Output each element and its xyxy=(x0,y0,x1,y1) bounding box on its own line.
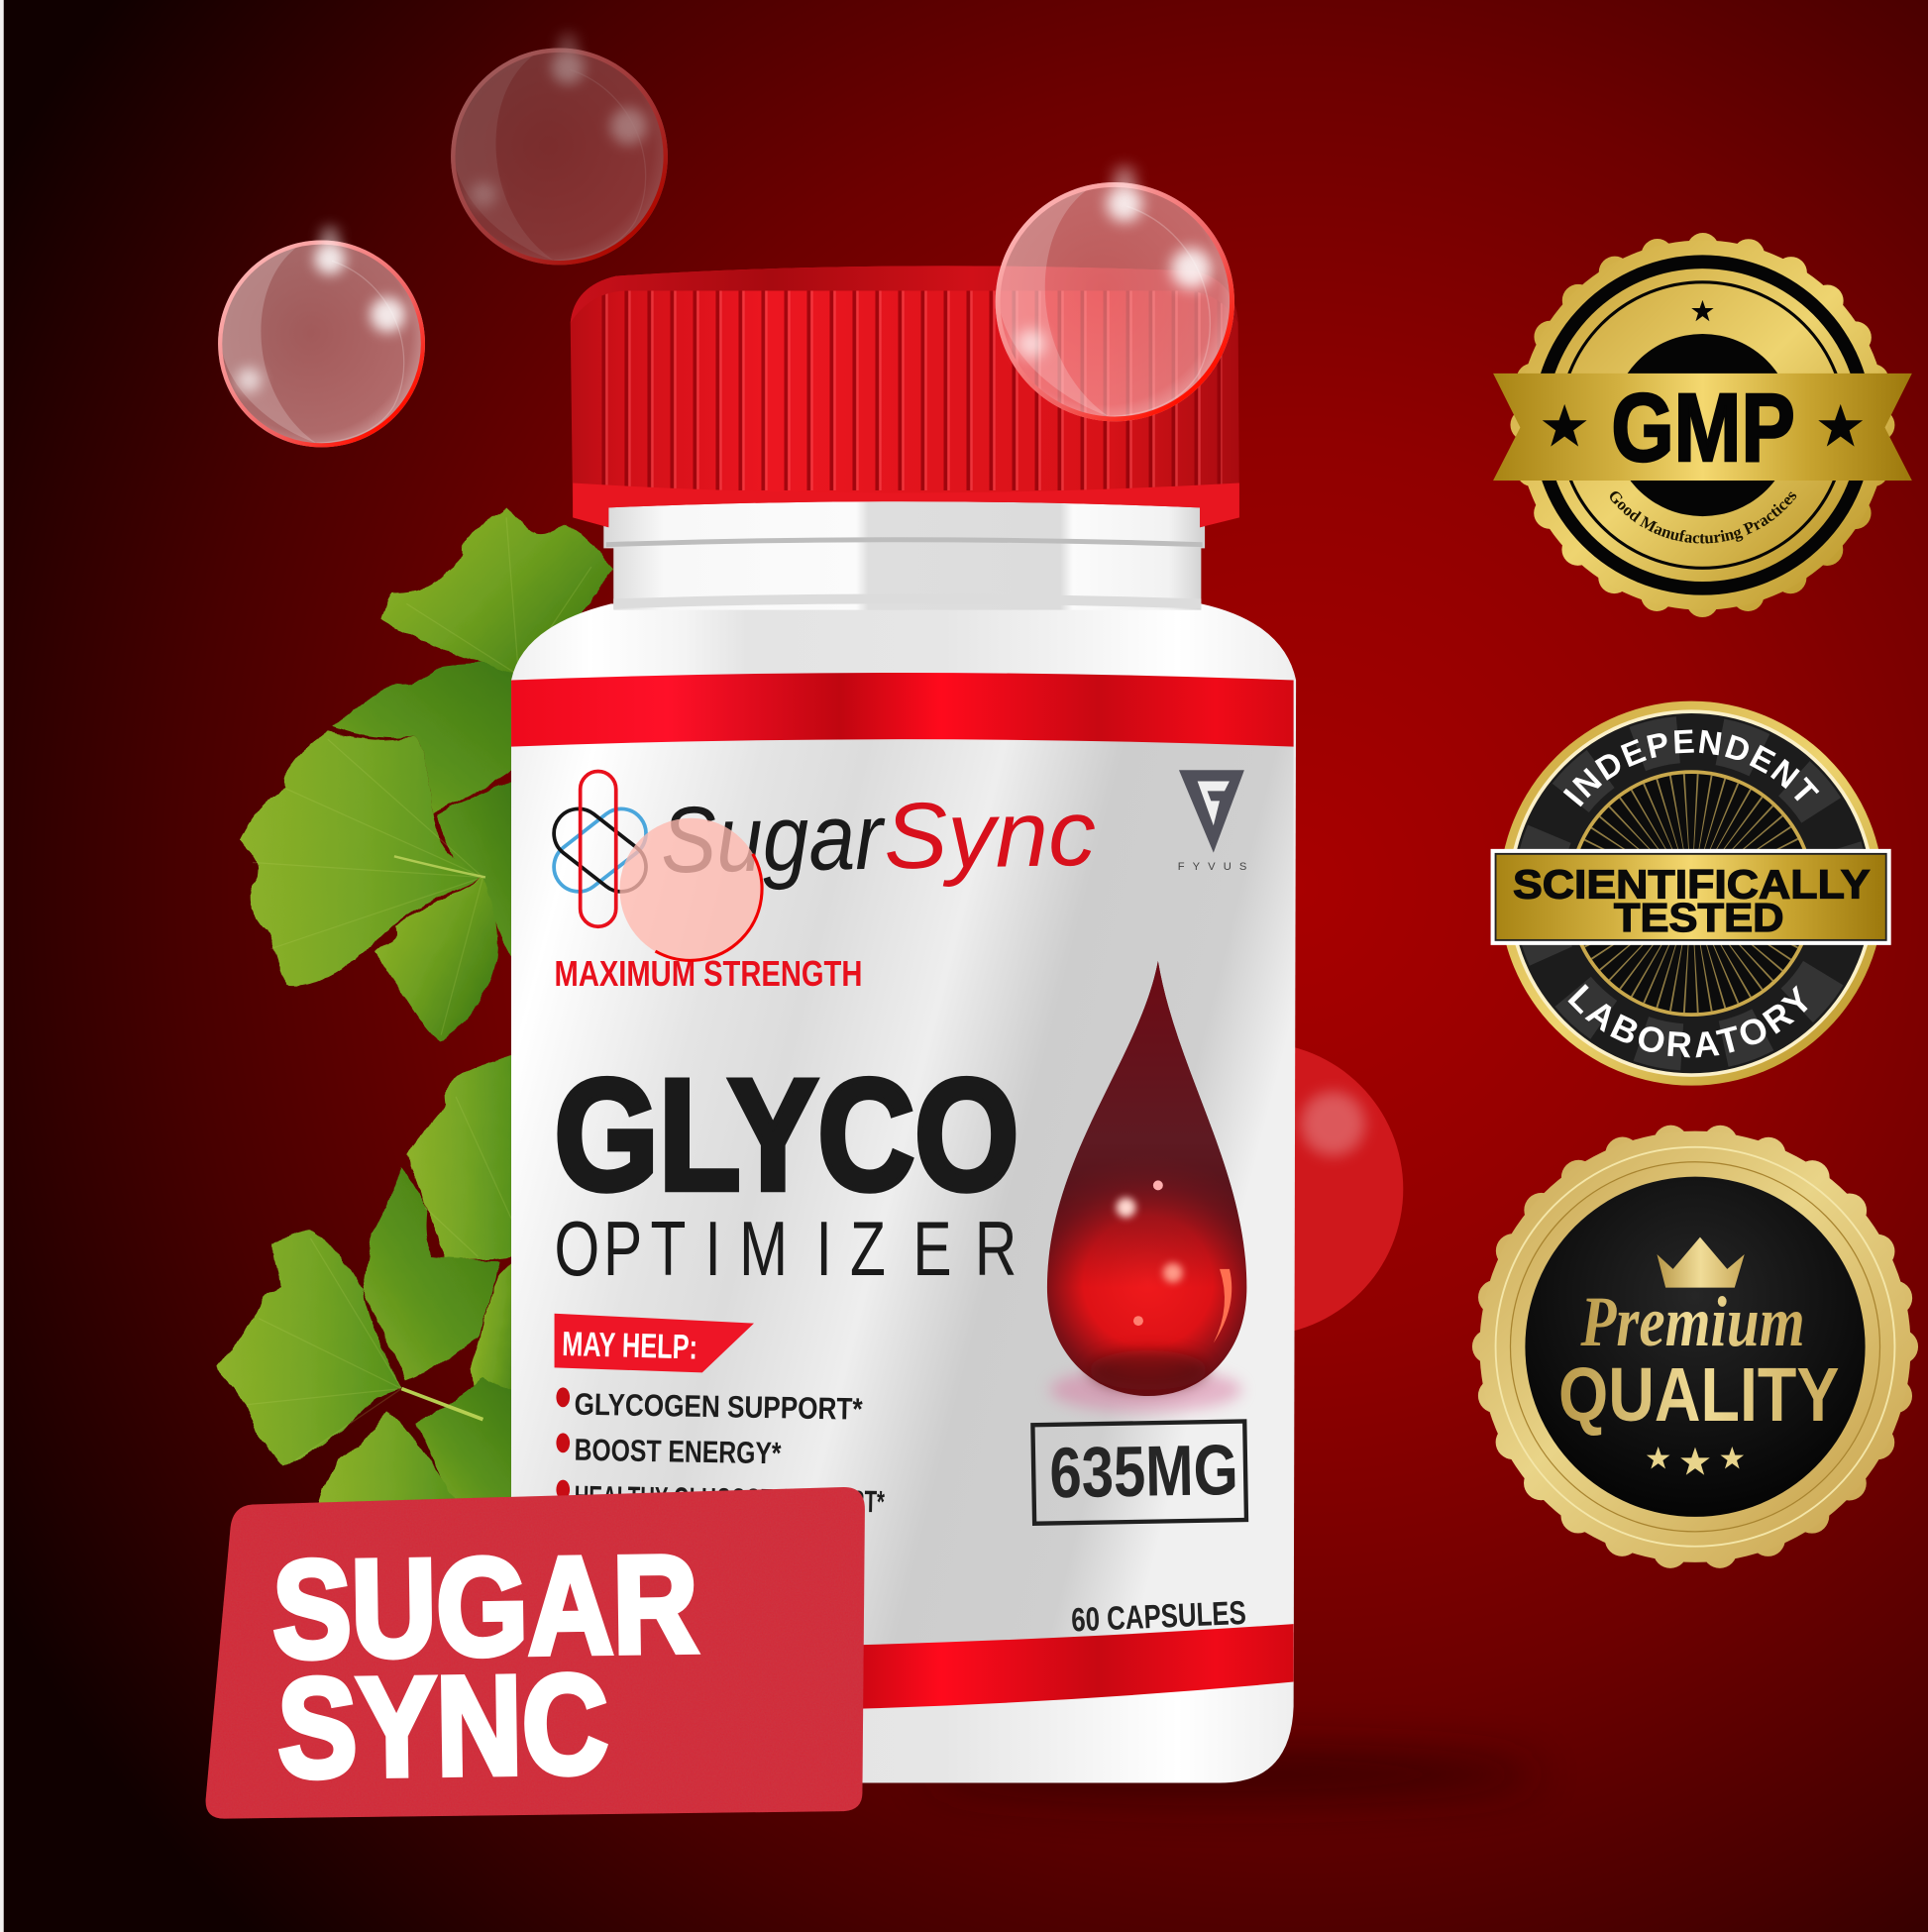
leaf vein: upper stem xyxy=(394,856,485,877)
leaf: big left fan xyxy=(217,1230,401,1466)
blood drop icon xyxy=(1047,961,1246,1412)
bubble: over bottle cap xyxy=(996,165,1234,421)
bottle neck xyxy=(603,499,1205,610)
bottle body xyxy=(511,603,1296,1783)
bubble: small, over logo xyxy=(619,818,763,961)
brand logo: atom mark xyxy=(544,772,656,926)
seal scallops xyxy=(1527,249,1878,601)
crown icon xyxy=(1657,1237,1745,1288)
manufacturer logo xyxy=(1178,770,1246,873)
quality: QUALITY xyxy=(1558,1352,1839,1438)
dosage box xyxy=(1032,1422,1246,1524)
leaf: rear low xyxy=(416,1377,517,1509)
leaf: right small xyxy=(471,1256,517,1503)
leaf veins: lower cluster xyxy=(247,1097,517,1460)
product name: optimizer: OPTIMIZER xyxy=(555,1205,1017,1292)
badge: scientifically tested xyxy=(1490,701,1891,1086)
capsule count: 60 CAPSULES xyxy=(1071,1595,1247,1640)
floor shadow under bottle xyxy=(924,1750,1540,1799)
ribbon xyxy=(1491,849,1891,945)
leaf: lower large fan xyxy=(374,877,497,1041)
badge: GMP xyxy=(1493,233,1912,617)
may help banner xyxy=(555,1314,754,1372)
ribbon star right xyxy=(1818,404,1863,447)
dosage box: 635MG xyxy=(1049,1431,1238,1513)
may help banner: MAY HELP: xyxy=(562,1325,698,1367)
brand card: sugar: SUGAR xyxy=(271,1527,698,1687)
leaf: upper right xyxy=(406,1053,517,1259)
curved caption: Good Manufacturing Practices xyxy=(1610,491,1797,543)
three stars xyxy=(1647,1447,1744,1475)
benefit: glycogen support: GLYCOGEN SUPPORT* xyxy=(574,1387,864,1427)
curved text: independent: INDEPENDENT xyxy=(1563,729,1819,806)
ribbon stars xyxy=(1543,404,1587,447)
curved text: laboratory: LABORATORY xyxy=(1567,984,1808,1058)
bottle cap xyxy=(571,266,1239,527)
sunburst rays xyxy=(1630,831,1753,955)
leaf: mid dark xyxy=(363,1165,499,1380)
badge: premium quality xyxy=(1479,1131,1911,1562)
ribbon text line 2: TESTED xyxy=(1614,895,1784,940)
maximum strength: MAXIMUM STRENGTH xyxy=(555,953,862,994)
leaf: rear upper xyxy=(333,663,517,813)
GMP text: GMP xyxy=(1611,374,1795,482)
top star xyxy=(1691,300,1714,321)
leaf: bottom fan xyxy=(317,1411,462,1509)
benefit list xyxy=(556,1387,886,1519)
premium: Premium xyxy=(1580,1282,1805,1361)
manufacturer logo: FYVUS xyxy=(1178,861,1246,873)
leaf veins: upper cluster xyxy=(253,517,591,1035)
leaf: right small xyxy=(436,781,517,967)
ribbon text line 1: SCIENTIFICALLY xyxy=(1513,862,1871,908)
leaves: lower cluster xyxy=(217,1053,517,1509)
leaf: top fan xyxy=(380,507,612,676)
bottle xyxy=(511,266,1296,1783)
brand card xyxy=(206,1487,865,1819)
bottom red band xyxy=(511,1624,1294,1712)
bubble: top centre, faint xyxy=(451,33,668,265)
leaves: upper cluster xyxy=(240,507,612,1041)
brand name: Sugar xyxy=(660,785,887,893)
benefit: partly hidden third line xyxy=(556,1479,886,1519)
ribbon xyxy=(1493,374,1912,481)
product name: glyco: GLYCO xyxy=(555,1046,1018,1223)
label background xyxy=(511,739,1294,1658)
brand name: Sync xyxy=(883,781,1097,890)
brand name xyxy=(660,781,1097,893)
benefit: partly hidden third line: HEALTHY GLUCOSE SUPPORT* xyxy=(574,1479,886,1519)
leaf stem: lower xyxy=(401,1389,482,1420)
benefit: boost energy: BOOST ENERGY* xyxy=(574,1433,783,1470)
brand card: sync: SYNC xyxy=(276,1647,609,1807)
top red band xyxy=(511,673,1294,747)
leaf: big left fan xyxy=(240,732,482,986)
bubble: top left xyxy=(218,226,425,447)
ring segments xyxy=(1538,739,1846,1047)
bubble: behind bottle at right xyxy=(1110,1042,1403,1336)
